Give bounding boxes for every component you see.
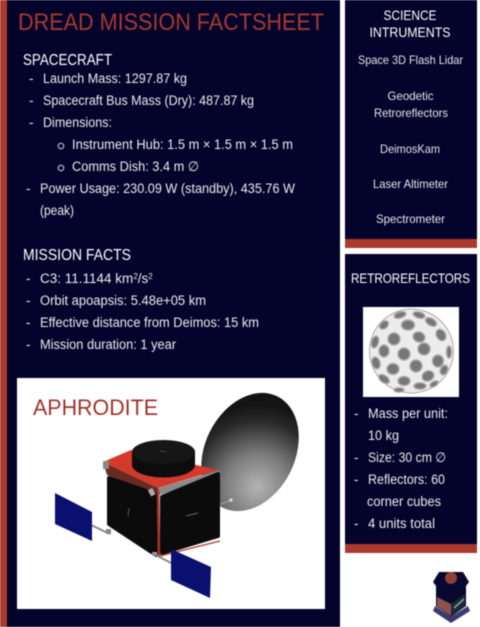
icon: mission shield logo <box>433 572 470 623</box>
panel: science instruments <box>345 0 477 248</box>
section: spacecraft: - <box>29 93 34 108</box>
section: mission facts: - <box>26 293 30 308</box>
section: spacecraft: (peak) <box>40 203 74 218</box>
section: spacecraft: SPACECRAFT <box>23 52 112 69</box>
section: mission facts: MISSION FACTS <box>23 247 131 264</box>
section: spacecraft: - <box>29 115 34 130</box>
section: mission facts: Orbit apoapsis: 5.48e+05 km <box>40 293 206 308</box>
panel: retroreflectors <box>345 254 477 553</box>
list: retroreflector facts: Size: 30 cm ∅ <box>368 450 446 465</box>
list: instruments: Space 3D Flash Lidar <box>358 53 463 67</box>
list: instruments: DeimosKam <box>380 142 440 156</box>
section: mission facts: Effective distance from Deimos: 15 km <box>40 315 259 330</box>
section: mission facts: Mission duration: 1 year <box>40 337 176 352</box>
section: spacecraft <box>23 52 295 218</box>
section: mission facts: C3: 11.1144 km <box>40 271 133 286</box>
icon: solar panel right <box>152 549 211 598</box>
section: mission facts <box>23 247 259 352</box>
heading: science instruments: SCIENCE <box>384 7 436 23</box>
section: spacecraft: Instrument Hub: 1.5 m × 1.5 m × 1.5 m <box>72 137 293 152</box>
section: spacecraft: Comms Dish: 3.4 m ∅ <box>72 159 199 174</box>
heading: Aphrodite: APHRODITE <box>33 395 158 420</box>
list: retroreflector facts: - <box>354 450 358 465</box>
panel: main factsheet <box>0 0 340 627</box>
list: retroreflector facts: Mass per unit: <box>368 406 448 421</box>
list: instruments: Spectrometer <box>376 212 445 226</box>
list: retroreflector facts: - <box>354 406 358 421</box>
heading: science instruments: INTRUMENTS <box>370 24 450 40</box>
section: spacecraft: Dimensions: <box>43 115 112 130</box>
section: mission facts: 2 <box>133 272 138 281</box>
section: spacecraft: Launch Mass: 1297.87 kg <box>43 71 187 86</box>
list: retroreflector facts: 4 units total <box>368 516 435 531</box>
icon: solar panel left <box>55 493 110 541</box>
list: instruments: Geodetic <box>388 89 434 103</box>
section: spacecraft: - <box>26 181 30 196</box>
title: DREAD MISSION FACTSHEET <box>18 9 324 36</box>
list: retroreflector facts: corner cubes <box>367 494 441 509</box>
list: instruments <box>358 53 463 226</box>
image: retroreflector sphere <box>363 307 459 397</box>
list: instruments: Laser Altimeter <box>373 177 448 191</box>
section: spacecraft: Spacecraft Bus Mass (Dry): 487.87 kg <box>43 93 254 108</box>
list: retroreflector facts: Reflectors: 60 <box>368 472 445 487</box>
section: mission facts: - <box>26 271 30 286</box>
heading: science instruments <box>370 7 450 40</box>
icon: comms dish <box>182 377 318 527</box>
list: instruments: Retroreflectors <box>374 106 448 120</box>
list: retroreflector facts: 10 kg <box>368 428 399 443</box>
icon: spacecraft bus <box>103 440 220 556</box>
section: spacecraft: - <box>29 71 34 86</box>
list: retroreflector facts <box>354 406 448 531</box>
panel: Aphrodite spacecraft illustration <box>17 377 325 609</box>
section: mission facts: - <box>26 337 30 352</box>
section: mission facts: 2 <box>148 272 153 281</box>
list: retroreflector facts: - <box>354 472 358 487</box>
section: mission facts: - <box>26 315 30 330</box>
section: mission facts: /s <box>138 271 149 286</box>
list: retroreflector facts: - <box>354 516 358 531</box>
section: spacecraft: Power Usage: 230.09 W (standby), 435.76 W <box>40 181 295 196</box>
